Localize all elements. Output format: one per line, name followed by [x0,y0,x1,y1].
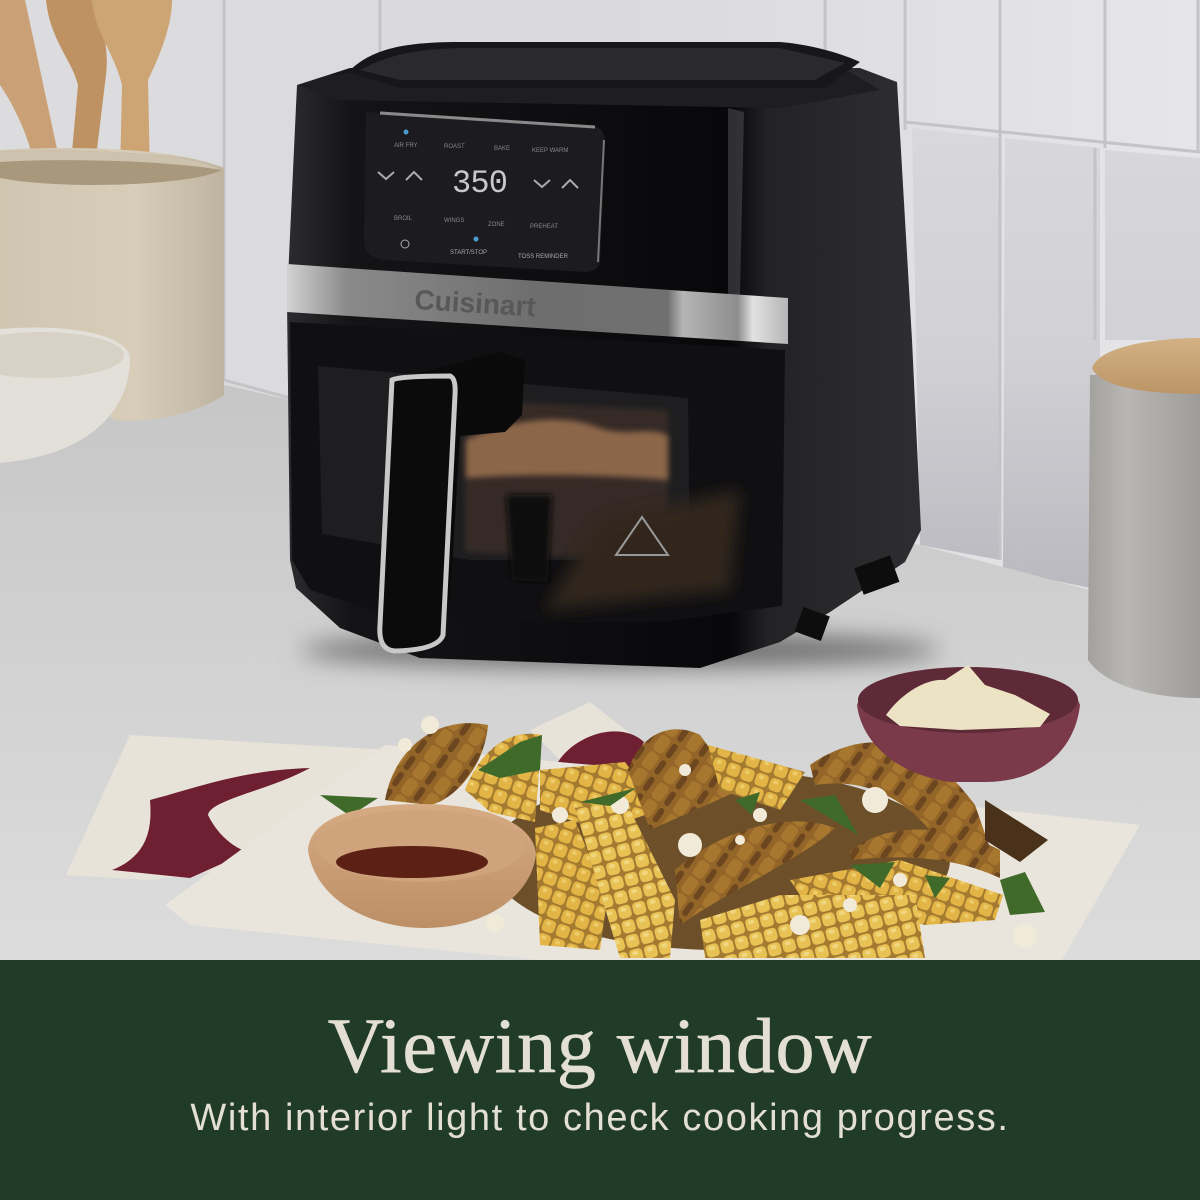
crock with wooden utensils [0,0,224,421]
shadow under fryer [300,632,940,668]
control panel: PREHEAT [530,224,558,230]
control panel: START/STOP [450,250,487,256]
white bowl [0,327,130,463]
photo scene: air fryer on kitchen counter [0,0,1200,960]
control panel: ROAST [444,144,465,150]
steel band [287,264,788,344]
basket front [290,322,785,622]
control panel: KEEP WARM [532,148,568,154]
control panel: TOSS REMINDER [518,254,569,260]
platter [165,745,1140,960]
subheading: With interior light to check cooking progress. [190,1097,1010,1139]
handle [392,352,525,600]
air fryer [287,42,921,668]
control panel [364,112,605,272]
wall tiles [0,0,1200,620]
wooden spice bowl [308,804,536,928]
caption band [0,960,1200,1200]
corn pile [320,716,1048,958]
control panel: 350 [452,165,508,202]
control panel: AIR FRY [394,143,418,149]
side highlight [728,108,744,296]
lid [348,42,860,88]
heading: Viewing window [328,1002,872,1089]
feet [795,607,830,641]
brand: Cuisinart [414,284,537,322]
control panel: BAKE [494,146,510,152]
napkin [66,702,644,880]
storage jar [1088,338,1200,698]
control panel: WINGS [444,218,464,224]
maroon bowl with cheese [857,665,1080,782]
counter [0,385,1200,960]
control panel: ZONE [488,222,505,228]
control panel: BROIL [394,216,413,222]
viewing window with food [318,366,740,610]
